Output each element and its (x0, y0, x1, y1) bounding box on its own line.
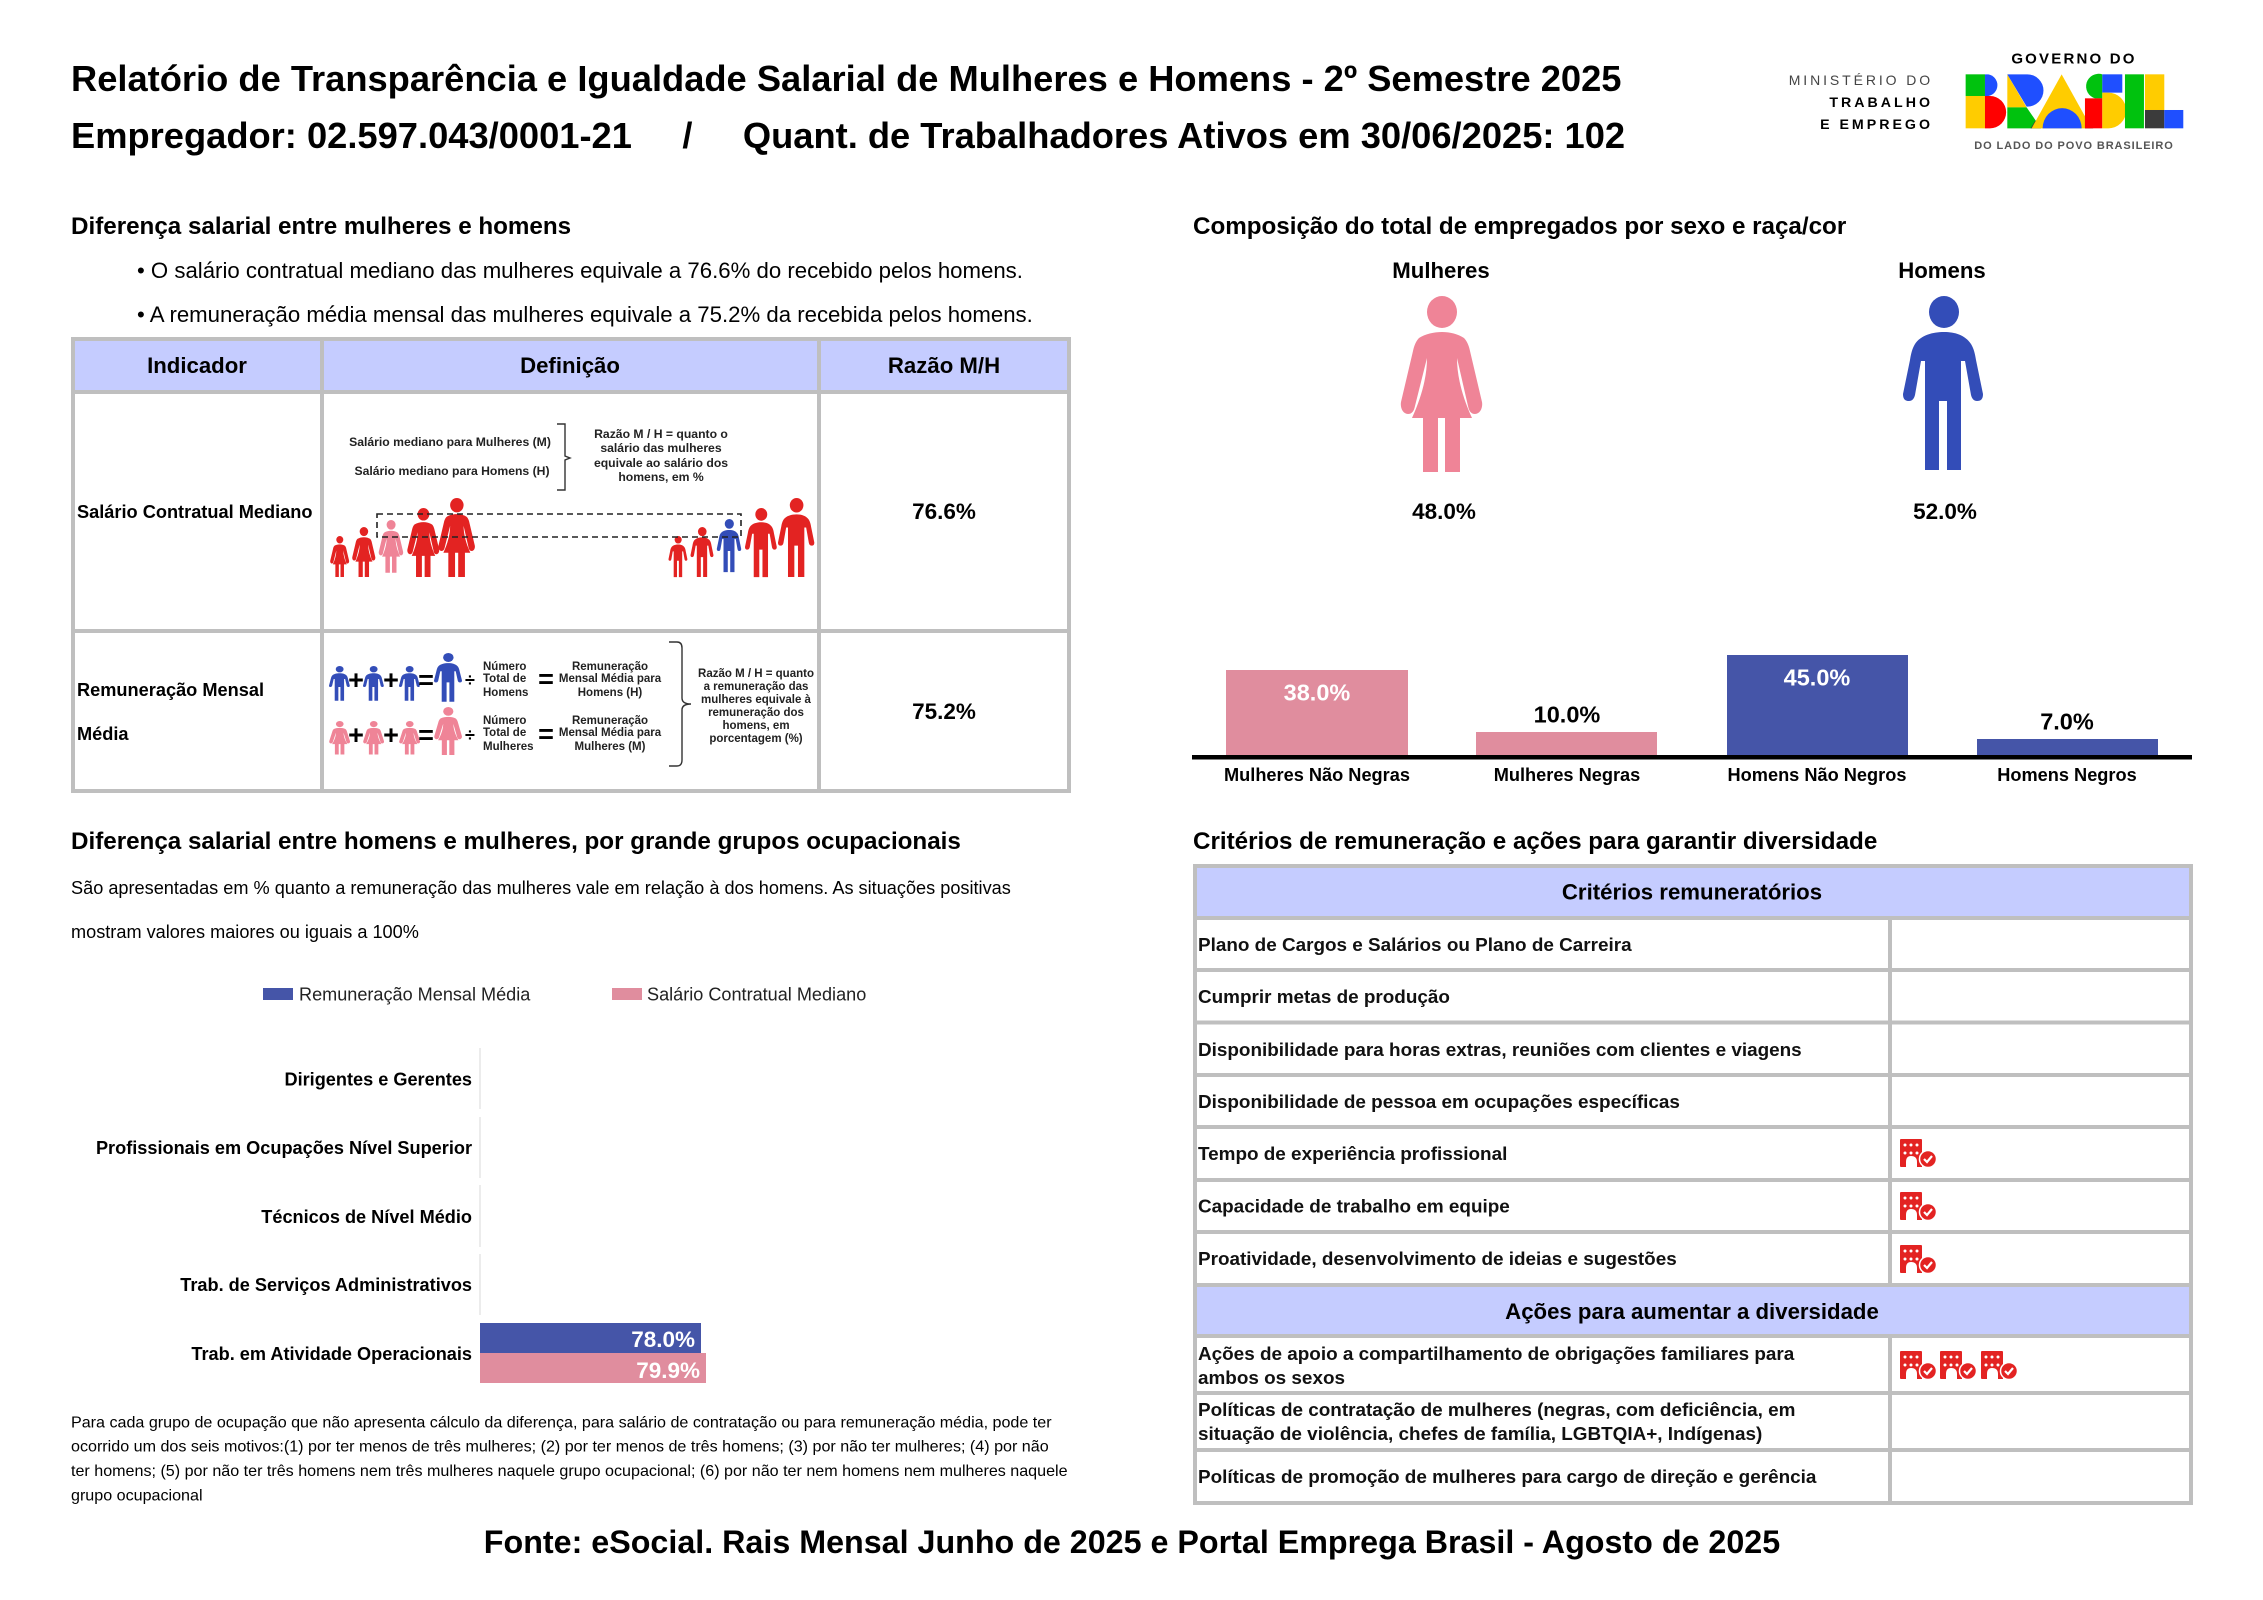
diagram: remuneração média: Número (483, 715, 526, 727)
bar chart: sexo e raça: 38.0% (1284, 680, 1350, 706)
bullets: • A remuneração média mensal das mulheres equivale a 75.2% da recebida pelos homens. (137, 302, 1033, 327)
bar chart: sexo e raça: Homens Não Negros (1728, 765, 1906, 785)
logo: governo do brasil: DO LADO DO POVO BRASILEIRO (1974, 140, 2174, 152)
table: critérios remuneratórios: Disponibilidade de pessoa em ocupações específicas (1198, 1092, 1680, 1113)
diagram: remuneração média: Homens (H) (578, 687, 642, 699)
diagram: remuneração média: Número (483, 661, 526, 673)
diagram: remuneração média: + (348, 720, 364, 750)
table: indicadores: Indicador (147, 353, 247, 378)
diagram: remuneração média: ÷ (465, 670, 475, 690)
legend: Salário Contratual Mediano (647, 984, 866, 1004)
figure: mulheres: Mulheres (1392, 258, 1490, 283)
bar chart: sexo e raça: Homens Negros (1997, 765, 2137, 785)
footer source: Fonte: eSocial. Rais Mensal Junho de 2025 e Portal Emprega Brasil - Agosto de 2025 (484, 1524, 1780, 1560)
table: critérios remuneratórios (1195, 866, 2191, 1503)
diagram: remuneração média: remuneração dos (708, 707, 804, 719)
bullets: • O salário contratual mediano das mulheres equivale a 76.6% do recebido pelos homens. (137, 258, 1023, 283)
logo: ministério: TRABALHO (1829, 95, 1933, 111)
table: indicadores: Definição (520, 353, 620, 378)
bar chart: ocupações (96, 1048, 706, 1383)
icons: capacidade de trabalho (1900, 1192, 1936, 1220)
logo: ministério (1789, 72, 1933, 133)
subtitle text: mostram valores maiores ou iguais a 100% (71, 922, 419, 942)
bar chart: ocupações: Técnicos de Nível Médio (261, 1207, 472, 1227)
legend (263, 984, 866, 1004)
bar chart: ocupações: Dirigentes e Gerentes (284, 1070, 472, 1090)
figure: homens (1898, 258, 1986, 524)
logo: ministério: MINISTÉRIO DO (1789, 72, 1933, 88)
table: critérios remuneratórios: ambos os sexos (1198, 1368, 1345, 1389)
icons: ações de apoio (1900, 1351, 2018, 1380)
legend: Remuneração Mensal Média (299, 984, 531, 1004)
bullets (137, 258, 1033, 327)
figure: mulheres (1392, 258, 1490, 524)
subtitle text: São apresentadas em % quanto a remuneração das mulheres vale em relação à dos homens. As situações positivas (71, 878, 1011, 898)
table: indicadores: Salário Contratual Mediano (77, 502, 312, 522)
diagram: remuneração média: + (383, 665, 399, 695)
bar chart: ocupações: Trab. em Atividade Operacionais (191, 1344, 472, 1364)
footnote: Para cada grupo de ocupação que não apresenta cálculo da diferença, para salário de contratação ou para remuneração média, pode ter (71, 1414, 1052, 1432)
table: critérios remuneratórios: Proatividade, desenvolvimento de ideias e sugestões (1198, 1249, 1677, 1270)
table: critérios remuneratórios: Políticas de contratação de mulheres (negras, com deficiência, em (1198, 1400, 1795, 1421)
diagram: remuneração média: Total de (483, 673, 526, 685)
diagram: remuneração média: homens, em (722, 720, 790, 732)
bar chart: ocupações: 79.9% (636, 1358, 700, 1383)
table: indicadores: 76.6% (912, 499, 976, 524)
table: indicadores: Média (77, 724, 129, 744)
subtitle text (71, 878, 1011, 942)
table: critérios remuneratórios: Capacidade de trabalho em equipe (1198, 1196, 1510, 1218)
footnote: ter homens; (5) por não ter três homens nem três mulheres naquele grupo ocupacional; (6) por não ter nem homens nem mulheres naquele (71, 1462, 1068, 1480)
diagram: remuneração média: a remuneração das (704, 681, 808, 693)
table: indicadores: Razão M/H (888, 353, 1000, 378)
footnote: grupo ocupacional (71, 1486, 203, 1504)
logo: ministério: E EMPREGO (1820, 117, 1933, 133)
diagram: salário mediano: equivale ao salário dos (594, 456, 728, 470)
diagram: salário mediano (330, 424, 814, 577)
table: critérios remuneratórios: Critérios remuneratórios (1562, 880, 1822, 904)
figure: mulheres: 48.0% (1412, 499, 1476, 524)
diagram: remuneração média: + (383, 720, 399, 750)
heading: diferença salarial: Diferença salarial entre mulheres e homens (71, 213, 571, 240)
diagram: remuneração média: Mensal Média para (559, 727, 662, 739)
table: critérios remuneratórios: Disponibilidade para horas extras, reuniões com clientes e viagens (1198, 1040, 1802, 1061)
table: critérios remuneratórios: Políticas de promoção de mulheres para cargo de direção e gerência (1198, 1467, 1817, 1488)
table: critérios remuneratórios: Cumprir metas de produção (1198, 987, 1450, 1008)
diagram: salário mediano: Razão M / H = quanto o (594, 427, 728, 441)
diagram: remuneração média: = (538, 719, 554, 749)
diagram: remuneração média: Remuneração (572, 715, 648, 727)
table: indicadores: Remuneração Mensal (77, 680, 264, 700)
table: critérios remuneratórios: situação de violência, chefes de família, LGBTQIA+, Indígenas) (1198, 1424, 1762, 1445)
heading: composição: Composição do total de empregados por sexo e raça/cor (1193, 213, 1847, 240)
footnote: ocorrido um dos seis motivos:(1) por ter menos de três mulheres; (2) por ter menos de três homens; (3) por não ter mulheres; (4) por não (71, 1438, 1049, 1456)
table: indicadores (73, 339, 1069, 791)
table: critérios remuneratórios: Ações de apoio a compartilhamento de obrigações familiares para (1198, 1344, 1795, 1365)
bar chart: ocupações: Trab. de Serviços Administrativos (180, 1275, 472, 1295)
diagram: salário mediano: Salário mediano para Mulheres (M) (349, 435, 551, 449)
diagram: remuneração média: = (418, 665, 434, 695)
bar chart: sexo e raça: Mulheres Negras (1494, 765, 1640, 785)
logo: governo do brasil (1966, 50, 2183, 152)
diagram: remuneração média: Mensal Média para (559, 673, 662, 685)
diagram: salário mediano: Salário mediano para Homens (H) (354, 464, 550, 478)
bar chart: ocupações: 78.0% (631, 1327, 695, 1352)
diagram: remuneração média: Total de (483, 727, 526, 739)
bar chart: sexo e raça (1192, 655, 2192, 785)
bar chart: sexo e raça: 7.0% (2040, 708, 2094, 734)
table: indicadores: 75.2% (912, 699, 976, 724)
diagram: remuneração média: + (348, 665, 364, 695)
logo: governo do brasil: GOVERNO DO (2011, 50, 2137, 68)
bar chart: ocupações: Profissionais em Ocupações Nível Superior (96, 1138, 472, 1158)
diagram: remuneração média: = (418, 720, 434, 750)
title: Relatório de Transparência e Igualdade Salarial de Mulheres e Homens - 2º Semestre 2025 (71, 58, 1621, 99)
title (71, 58, 1625, 156)
diagram: remuneração média: = (538, 664, 554, 694)
diagram: remuneração média: Mulheres (483, 741, 534, 753)
diagram: salário mediano: salário das mulheres (600, 441, 722, 455)
figure: homens: 52.0% (1913, 499, 1977, 524)
icons: tempo de experiência (1900, 1139, 1936, 1168)
bar chart: sexo e raça: Mulheres Não Negras (1224, 765, 1410, 785)
figure: homens: Homens (1898, 258, 1986, 283)
diagram: remuneração média (329, 642, 814, 766)
title: Empregador: 02.597.043/0001-21 / Quant. de Trabalhadores Ativos em 30/06/2025: 102 (71, 115, 1625, 156)
bar chart: sexo e raça: 10.0% (1534, 702, 1600, 728)
icons: proatividade (1900, 1245, 1936, 1274)
heading: grupos ocupacionais: Diferença salarial entre homens e mulheres, por grande grupos ocupacionais (71, 828, 961, 855)
table: critérios remuneratórios: Ações para aumentar a diversidade (1505, 1299, 1879, 1324)
diagram: salário mediano: homens, em % (618, 470, 704, 484)
diagram: remuneração média: mulheres equivale à (701, 694, 812, 706)
bar chart: sexo e raça: 45.0% (1784, 664, 1850, 690)
table: critérios remuneratórios: Tempo de experiência profissional (1198, 1144, 1507, 1165)
footnote (71, 1414, 1068, 1504)
diagram: remuneração média: porcentagem (%) (709, 733, 803, 745)
diagram: remuneração média: Mulheres (M) (575, 741, 646, 753)
table: critérios remuneratórios: Plano de Cargos e Salários ou Plano de Carreira (1198, 935, 1632, 956)
heading: critérios: Critérios de remuneração e ações para garantir diversidade (1193, 828, 1877, 855)
diagram: remuneração média: ÷ (465, 725, 475, 745)
diagram: remuneração média: Remuneração (572, 661, 648, 673)
diagram: remuneração média: Homens (483, 687, 528, 699)
diagram: remuneração média: Razão M / H = quanto (698, 668, 814, 680)
